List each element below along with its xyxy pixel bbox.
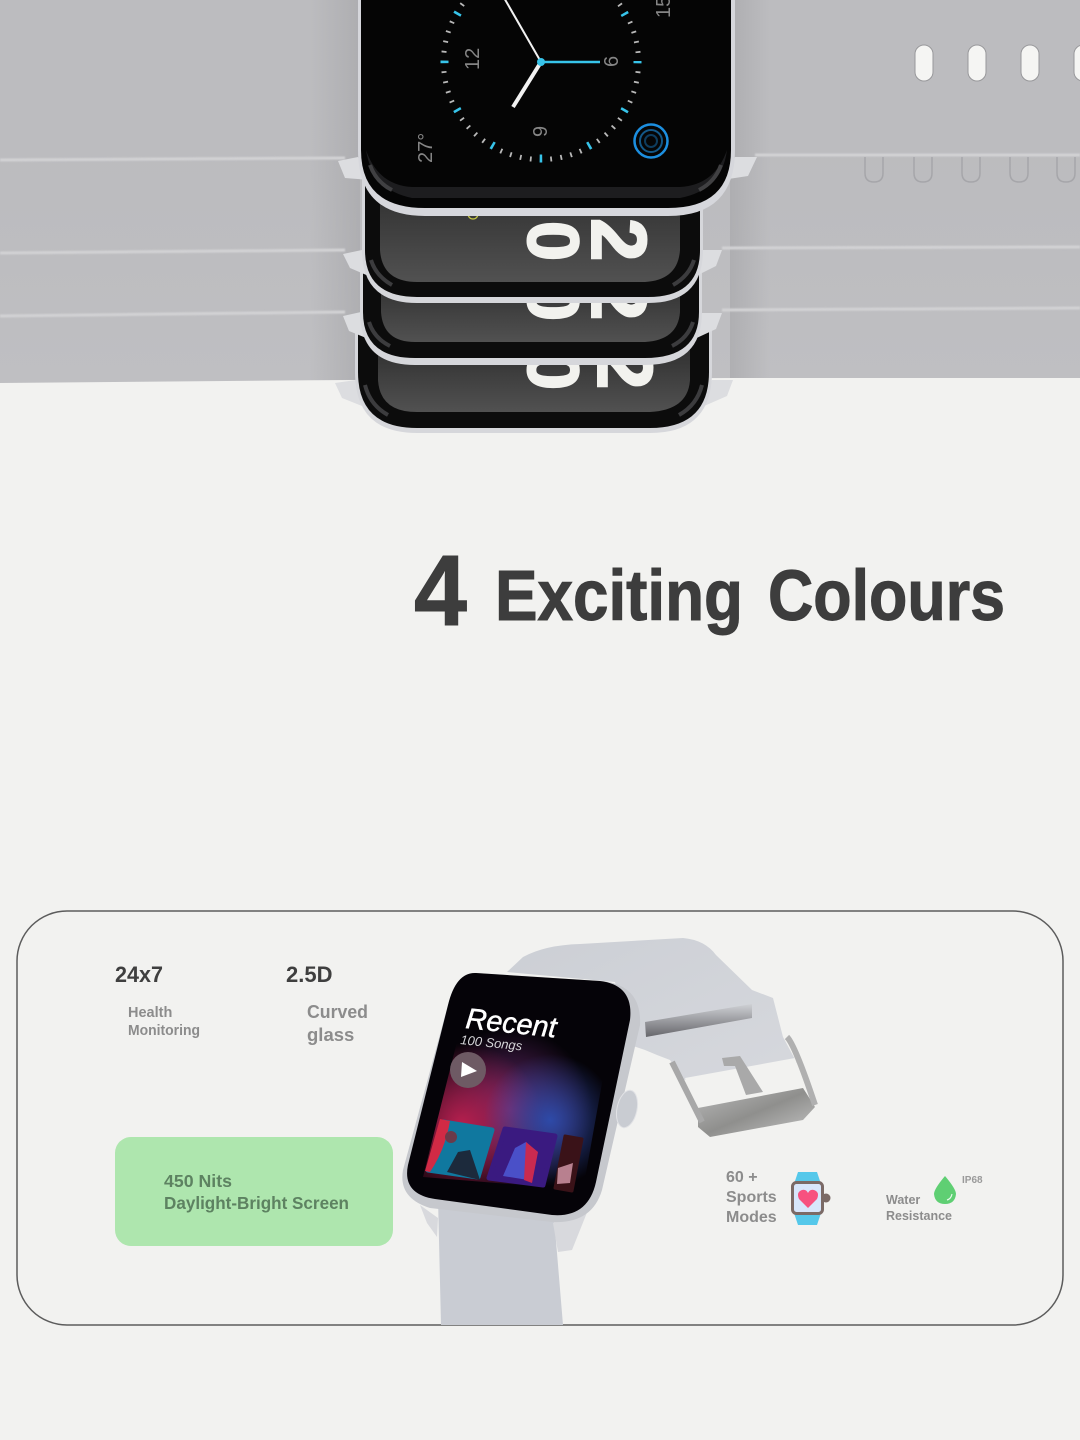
watch 1 case — [338, 0, 757, 216]
callout: 450 nits — [115, 1137, 393, 1246]
feature: 24x7 health monitoring: Health — [128, 1005, 172, 1021]
watch 3: 2 — [575, 277, 663, 320]
feature: 60+ sports modes — [726, 1169, 830, 1226]
clock numerals: 6 — [601, 56, 623, 67]
strap holes — [915, 45, 1080, 81]
clock numerals: 12 — [462, 48, 484, 70]
watch 4 (back): 0 — [512, 350, 592, 390]
clock numerals — [415, 0, 675, 163]
feature: 24x7 health monitoring: 24x7 — [115, 962, 163, 987]
screen glow — [423, 990, 617, 1190]
feature: 2.5D curved glass: glass — [307, 1024, 354, 1045]
strap notches — [865, 157, 1075, 182]
clock minute ticks — [444, 0, 638, 160]
feature: 24x7 health monitoring — [115, 962, 200, 1039]
title: Exciting — [495, 557, 743, 636]
panel outline — [17, 911, 1063, 1325]
callout: 450 nits: 450 Nits — [164, 1171, 232, 1191]
clock hands — [503, 0, 600, 107]
lugs — [420, 1205, 590, 1252]
watch 4 (back) — [335, 325, 733, 433]
clock numerals: 9 — [530, 126, 552, 137]
grey straps band — [0, 0, 1080, 383]
feature: 24x7 health monitoring: Monitoring — [128, 1023, 200, 1039]
icon: water drop — [934, 1176, 956, 1204]
watch 4 (back): 2 — [581, 346, 669, 389]
callout: 450 nits: Daylight-Bright Screen — [164, 1193, 349, 1213]
front strap — [438, 1198, 563, 1325]
panel: features — [17, 911, 1063, 1325]
crown — [613, 1088, 641, 1130]
feature: water resistance — [886, 1175, 983, 1223]
screen text: 100 Songs — [460, 1032, 523, 1054]
title: 4 — [414, 535, 467, 647]
album tiles — [425, 1119, 582, 1191]
feature: water resistance: Resistance — [886, 1209, 952, 1223]
feature: 60+ sports modes: 60 + — [726, 1169, 758, 1186]
title: Colours — [768, 557, 1005, 636]
watch 2: 2 — [575, 218, 663, 261]
watch 2 — [343, 170, 722, 303]
screen text: Recent — [464, 1003, 560, 1045]
watch illustration — [402, 938, 815, 1325]
case — [402, 973, 640, 1222]
watch 3: 0 — [512, 281, 592, 321]
screen glass — [407, 973, 630, 1215]
feature: 60+ sports modes: Modes — [726, 1209, 777, 1226]
hero: stacked watches on grey straps — [0, 0, 1080, 433]
watch 1 (front) with clock face — [338, 0, 757, 216]
feature: 2.5D curved glass — [286, 962, 368, 1045]
feature: 2.5D curved glass: Curved — [307, 1001, 368, 1022]
back strap — [507, 938, 797, 1080]
feature: 60+ sports modes: Sports — [726, 1189, 777, 1206]
clock numerals: 27° — [415, 133, 437, 163]
strap shadow — [645, 1004, 752, 1037]
buckle — [672, 1037, 815, 1137]
feature: water resistance: Water — [886, 1193, 920, 1207]
watch 2: 0 — [512, 221, 592, 261]
watch 3 — [343, 260, 722, 365]
feature: 2.5D curved glass: 2.5D — [286, 962, 332, 987]
activity ring icon — [634, 124, 668, 158]
play button — [450, 1052, 486, 1088]
icon: heart watch — [792, 1172, 830, 1225]
feature: water resistance: IP68 — [962, 1175, 983, 1186]
title — [414, 535, 1005, 647]
